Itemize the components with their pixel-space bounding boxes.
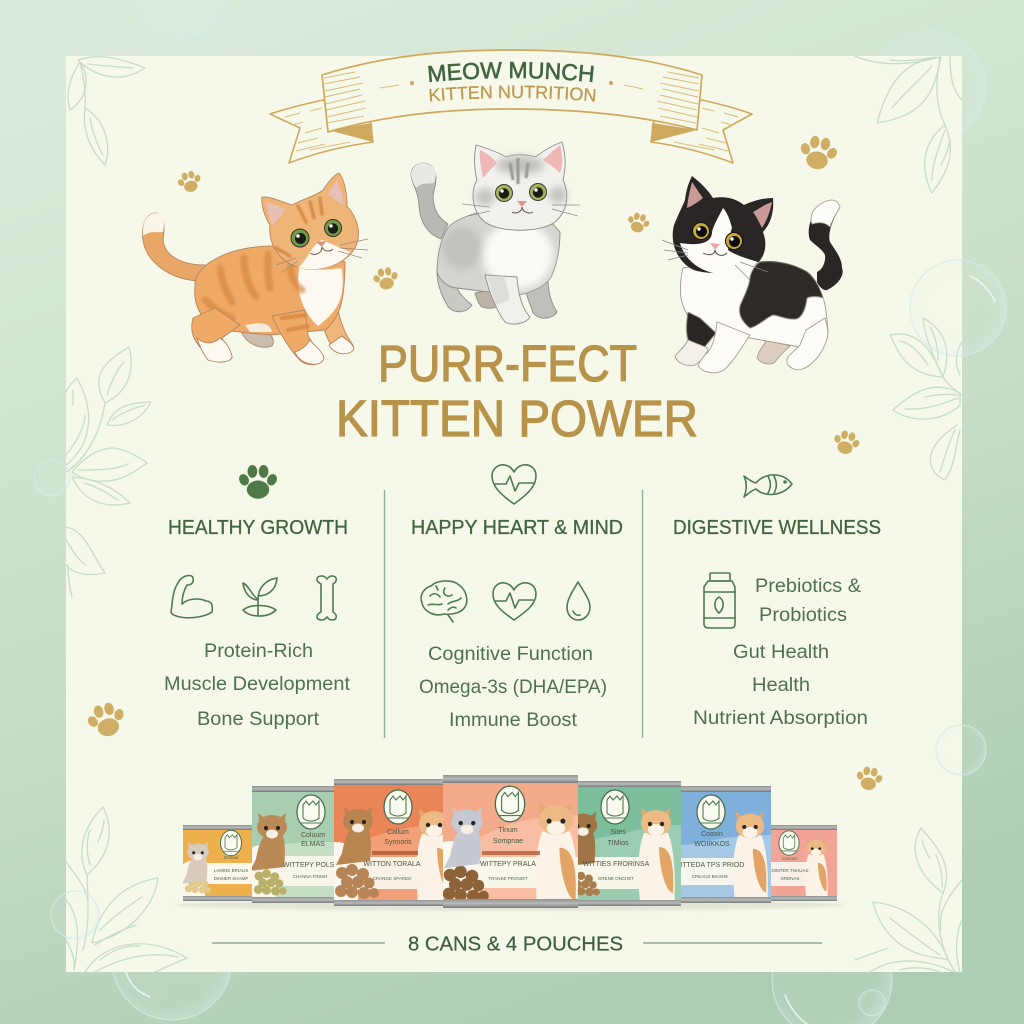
main title bbox=[336, 335, 698, 447]
head bbox=[473, 142, 567, 230]
can: sage green: WITTEPY POLSE bbox=[283, 862, 339, 869]
icon: muscle bbox=[171, 576, 212, 618]
can: center peach bbox=[443, 775, 578, 908]
can: blue bbox=[681, 786, 771, 903]
can: blue: BITTEDA TPS PRIOD bbox=[676, 862, 744, 869]
can: center peach: Sompnae bbox=[493, 838, 523, 845]
leaves: right middle bbox=[890, 318, 962, 480]
label: probiotics: Probiotics bbox=[759, 605, 847, 626]
body shading bbox=[442, 226, 482, 270]
icon: heart with pulse bbox=[492, 465, 536, 504]
panel: healthy growth bbox=[164, 465, 351, 730]
cream card panel bbox=[66, 56, 962, 972]
grey kitten bbox=[411, 142, 580, 324]
heading: happy heart and mind: HAPPY HEART & MIND bbox=[411, 517, 623, 539]
muzzle bbox=[298, 240, 350, 269]
label: nutrient absorption: Nutrient Absorption bbox=[693, 708, 868, 729]
can: blue: WOIIKKOS bbox=[694, 841, 730, 848]
can: center peach: WITTEPY PRALA bbox=[480, 861, 536, 868]
can: mint green: Sites bbox=[610, 829, 626, 836]
soap bubbles over card bbox=[34, 260, 1006, 939]
icon: bone bbox=[317, 576, 336, 620]
can: mint green: WITTIES FRORINSA bbox=[583, 861, 650, 868]
can: pink small bbox=[770, 825, 837, 904]
nose and mouth bbox=[316, 241, 326, 247]
eyes bbox=[496, 184, 512, 202]
center front leg bbox=[485, 275, 530, 324]
heading: digestive wellness: DIGESTIVE WELLNESS bbox=[673, 517, 881, 539]
whiskers bbox=[662, 240, 768, 280]
back leg bbox=[192, 308, 240, 361]
head bbox=[262, 173, 358, 269]
whiskers bbox=[462, 204, 580, 216]
inner ears bbox=[687, 182, 703, 208]
tail hatch lines bbox=[285, 108, 738, 151]
black front leg bbox=[686, 312, 716, 349]
heading: healthy growth: HEALTHY GROWTH bbox=[168, 517, 348, 539]
can: sage green bbox=[250, 786, 339, 903]
label: protein-rich: Protein-Rich bbox=[204, 641, 313, 662]
far back leg bbox=[475, 290, 497, 308]
product cans row bbox=[175, 775, 845, 924]
mid back leg bbox=[757, 340, 790, 364]
footer rules bbox=[212, 942, 822, 944]
can: yellow small bbox=[182, 825, 254, 901]
label: immune boost: Immune Boost bbox=[449, 710, 578, 731]
panel: happy heart and mind bbox=[411, 465, 623, 731]
tabby stripes bbox=[205, 254, 302, 318]
icon: brain bbox=[421, 581, 467, 622]
front leg bbox=[272, 310, 324, 365]
footer caption: 8 CANS & 4 POUCHES bbox=[408, 934, 623, 956]
main hatch lines bbox=[324, 72, 699, 123]
title line 1: PURR-FECT bbox=[378, 335, 637, 392]
inner ears bbox=[266, 202, 285, 226]
icon: supplement bottle bbox=[704, 573, 735, 628]
label: prebiotics: Prebiotics & bbox=[755, 576, 861, 597]
left foot bbox=[675, 340, 708, 366]
can: blue: Coasin bbox=[701, 831, 723, 838]
tail bbox=[142, 213, 205, 281]
gold folds bbox=[328, 123, 373, 142]
can: sage green: ELMAS bbox=[301, 841, 325, 848]
can: pink small: DIMTER TNHUAS bbox=[772, 868, 808, 873]
rear leg bbox=[787, 318, 828, 370]
can: yellow small: DINNER SHAMP bbox=[214, 876, 248, 881]
panel: digestive wellness bbox=[673, 475, 881, 729]
can: coral bbox=[334, 779, 443, 906]
can: center peach: Tlnum bbox=[498, 827, 518, 834]
head shading bbox=[475, 156, 567, 205]
corner leaves: top right bbox=[855, 56, 962, 193]
banner subtitle: KITTEN NUTRITION bbox=[429, 86, 596, 102]
ground shadow bbox=[175, 899, 845, 911]
far legs bbox=[240, 328, 273, 347]
column dividers bbox=[384, 490, 642, 738]
title line 2: KITTEN POWER bbox=[336, 390, 698, 447]
nose and mouth bbox=[710, 243, 720, 250]
forehead stripes bbox=[510, 158, 528, 184]
can: mint green bbox=[578, 781, 681, 906]
eyes bbox=[692, 222, 710, 240]
can: coral: Callum bbox=[387, 829, 409, 836]
label: cognitive function: Cognitive Function bbox=[428, 644, 593, 665]
black saddle bbox=[739, 261, 823, 328]
chest bbox=[298, 265, 343, 326]
can: sage green: CHANNA FINISH bbox=[293, 874, 327, 879]
corner leaves: top left bbox=[68, 57, 145, 165]
can: coral: CRANGE SPARED bbox=[373, 876, 412, 881]
can: coral: WITTON TORALA bbox=[363, 861, 421, 868]
label: bone support: Bone Support bbox=[197, 709, 320, 730]
gold paw prints bbox=[83, 133, 885, 792]
label: health: Health bbox=[752, 675, 810, 696]
can: mint green: GRENE ONCHET bbox=[598, 876, 634, 881]
front leg bbox=[698, 322, 750, 373]
inner ears bbox=[480, 150, 497, 178]
icon: water drop bbox=[567, 582, 590, 620]
tail bbox=[411, 163, 448, 239]
can: pink small: Cemum bbox=[782, 856, 798, 861]
can: yellow small: Omnus bbox=[224, 855, 239, 860]
leaves: bottom right bbox=[855, 828, 962, 972]
body bbox=[437, 212, 560, 295]
eyes bbox=[291, 229, 309, 247]
nose and mouth bbox=[517, 201, 527, 207]
can: coral: Synnoris bbox=[384, 839, 412, 846]
can: center peach: TRANSE PRONIST bbox=[488, 876, 528, 881]
label: gut health: Gut Health bbox=[733, 642, 829, 663]
can: pink small: GRENAS bbox=[780, 876, 800, 881]
icon: heart with pulse small bbox=[493, 583, 536, 620]
leaves: left middle bbox=[66, 347, 151, 597]
banner ribbon bbox=[269, 49, 753, 164]
label: muscle development: Muscle Development bbox=[164, 674, 351, 695]
chest bbox=[483, 221, 553, 289]
can: mint green: TIMios bbox=[608, 840, 629, 847]
head bbox=[673, 176, 773, 273]
whiskers bbox=[276, 239, 368, 272]
ribbon tails bbox=[270, 100, 752, 163]
tail bbox=[809, 200, 843, 290]
icon: fish bbox=[744, 475, 792, 497]
icon: paw bbox=[237, 465, 279, 499]
can: yellow small: LAMINE BRIAUS bbox=[214, 868, 248, 873]
can: sage green: Coluum bbox=[301, 832, 325, 839]
orange tabby kitten bbox=[142, 173, 368, 365]
black and white kitten bbox=[662, 176, 843, 373]
white muzzle and blaze bbox=[680, 208, 758, 274]
leaves: bottom left bbox=[66, 807, 187, 972]
near back leg bbox=[437, 272, 472, 312]
ribbon main bbox=[322, 50, 702, 132]
label: omega-3s: Omega-3s (DHA/EPA) bbox=[419, 677, 607, 698]
body bbox=[680, 261, 828, 347]
can: blue: CREAUS BIASHE bbox=[692, 874, 728, 879]
banner brand name: MEOW MUNCH bbox=[428, 62, 594, 82]
right front leg bbox=[525, 282, 557, 318]
body bbox=[195, 246, 345, 335]
icon: sprout bbox=[243, 578, 277, 616]
